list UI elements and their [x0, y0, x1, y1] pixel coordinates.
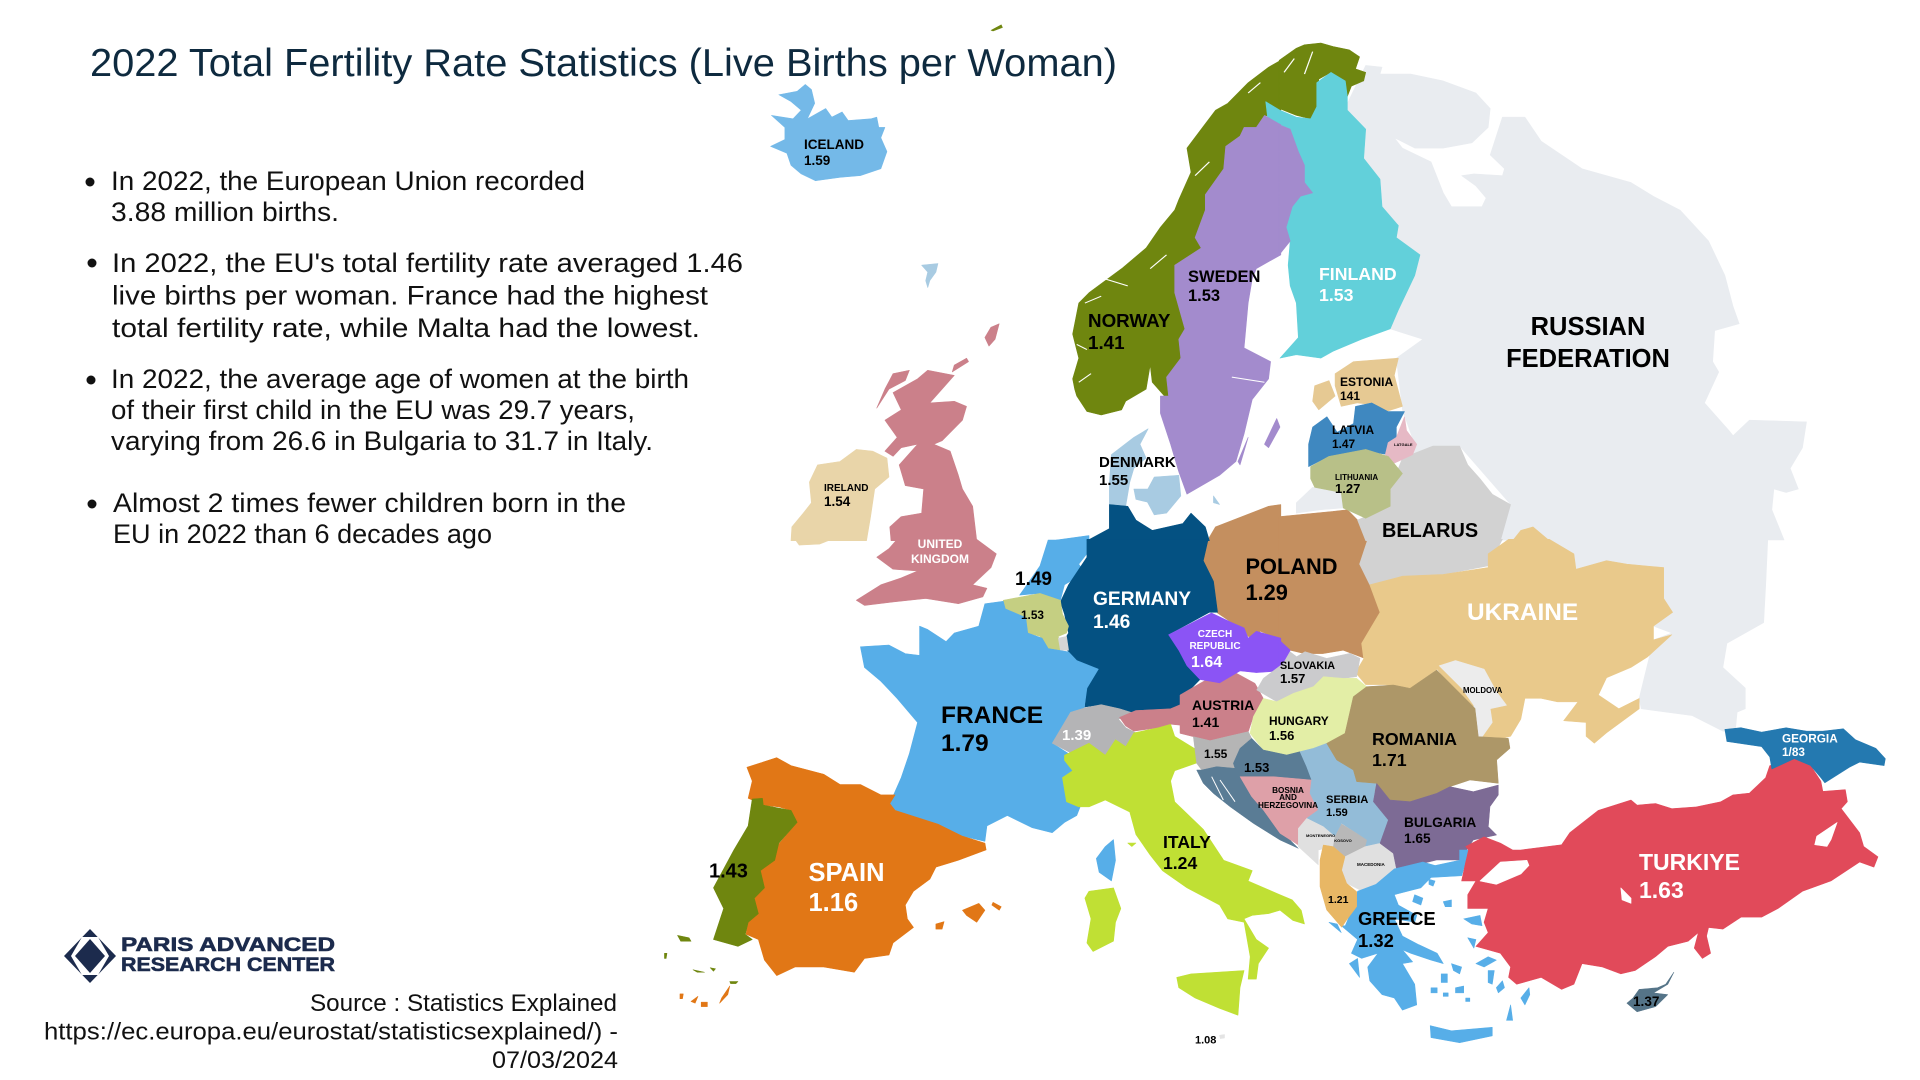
label: Georgia: 1/83	[1782, 745, 1805, 759]
source note: Source : Statistics Explained	[310, 990, 617, 1017]
label: Hungary: HUNGARY	[1269, 714, 1329, 728]
country: Norway	[1073, 43, 1366, 415]
country: Netherlands	[1020, 536, 1089, 600]
label: Serbia: SERBIA	[1326, 794, 1368, 806]
country: Slovakia	[1257, 652, 1360, 702]
label: United Kingdom: UNITED	[918, 537, 962, 551]
country: Serbia	[1300, 743, 1388, 847]
country: Albania	[1320, 845, 1357, 927]
label: Ukraine: UKRAINE	[1467, 599, 1578, 626]
country: Montenegro	[1298, 818, 1335, 865]
country: Bulgaria	[1373, 783, 1498, 870]
region: Latgale	[1385, 417, 1417, 463]
label: Poland: POLAND	[1246, 554, 1338, 579]
label: Italy: ITALY	[1163, 832, 1211, 852]
label: Serbia: 1.59	[1326, 807, 1348, 819]
label: Latgale: LATGALE	[1394, 442, 1413, 447]
label: Bulgaria: 1.65	[1404, 831, 1431, 846]
label: Austria: 1.41	[1192, 714, 1219, 730]
label: Turkiye: 1.63	[1639, 877, 1684, 903]
country: Bosnia and Herzegovina	[1240, 777, 1318, 845]
label: Finland: FINLAND	[1319, 264, 1397, 284]
country: Georgia	[1725, 728, 1885, 783]
label: Belgium value: 1.53	[1021, 608, 1044, 622]
bullet: births: 3.88 million births.	[111, 197, 339, 227]
label: Bosnia and Herzegovina: BOSNIA	[1272, 786, 1304, 795]
country: Italy	[1062, 724, 1304, 1015]
label: Switzerland value: 1.39	[1062, 727, 1091, 744]
label: Germany: GERMANY	[1093, 589, 1191, 610]
territory: Jan Mayen	[991, 25, 1002, 31]
bullet: six decades: EU in 2022 than 6 decades ago	[113, 519, 492, 549]
logo: Paris Advanced Research Center: RESEARCH CENTER	[121, 954, 335, 976]
label: Cyprus value: 1.37	[1633, 994, 1659, 1009]
country: Russian Federation	[1296, 65, 1807, 733]
label: Slovakia: SLOVAKIA	[1280, 660, 1335, 672]
label: Denmark: DENMARK	[1099, 454, 1176, 471]
label: Iceland: 1.59	[804, 153, 830, 168]
bullet: fertility rate: In 2022, the EU's total fertility rate averaged 1.46	[112, 248, 743, 278]
label: Austria: AUSTRIA	[1192, 697, 1254, 713]
label: Czech Republic value: 1.64	[1191, 654, 1222, 671]
logo: Paris Advanced Research Center	[64, 929, 335, 983]
label: Russian Federation: RUSSIAN	[1531, 313, 1645, 341]
label: Slovakia: 1.57	[1280, 671, 1305, 686]
country: Finland	[1266, 72, 1420, 358]
country: Turkiye	[1462, 759, 1878, 989]
bullet: six decades: Almost 2 times fewer children born in the	[113, 488, 626, 518]
label: Denmark: 1.55	[1099, 472, 1128, 489]
label: Germany: 1.46	[1093, 612, 1130, 633]
country: Germany	[1060, 505, 1218, 714]
label: Latvia: 1.47	[1332, 437, 1356, 451]
country: Hungary	[1250, 677, 1367, 755]
bullet: births	[86, 166, 585, 227]
country: North Macedonia	[1342, 843, 1396, 890]
country: Slovenia	[1193, 732, 1252, 770]
label: Kosovo: KOSOVO	[1334, 838, 1352, 843]
bullet: average age: varying from 26.6 in Bulgaria to 31.7 in Italy.	[111, 426, 653, 456]
bullet: six decades	[88, 488, 626, 549]
country: Switzerland	[1052, 705, 1136, 755]
label: Bosnia and Herzegovina: HERZEGOVINA	[1258, 801, 1318, 810]
label: Finland: 1.53	[1319, 285, 1354, 305]
label: Greece: 1.32	[1358, 930, 1394, 951]
country: Ukraine	[1356, 527, 1673, 743]
label: Malta value: 1.08	[1195, 1034, 1216, 1046]
label: Bulgaria: BULGARIA	[1404, 815, 1476, 830]
country: Romania	[1327, 670, 1510, 802]
country: Belgium	[1003, 593, 1069, 650]
label: Spain: 1.16	[808, 889, 858, 917]
label: Russian Federation: FEDERATION	[1506, 345, 1670, 373]
label: Romania: 1.71	[1372, 750, 1407, 770]
label: Poland: 1.29	[1246, 580, 1288, 605]
country: Estonia	[1313, 358, 1402, 412]
label: Spain: SPAIN	[808, 859, 885, 887]
bullet: average age: of their first child in the EU was 29.7 years,	[111, 395, 635, 425]
label: Czech Republic: CZECH	[1198, 629, 1232, 640]
bullet: fertility rate: live births per woman. France had the highest	[112, 280, 709, 310]
source note: 07/03/2024	[492, 1047, 618, 1074]
label: Albania value: 1.21	[1328, 894, 1349, 906]
country: Belarus	[1358, 446, 1511, 585]
country: France	[860, 601, 1116, 881]
country: Iceland	[771, 84, 887, 181]
label: Czech Republic: REPUBLIC	[1189, 641, 1241, 652]
country: Austria	[1120, 673, 1263, 741]
map of Europe	[664, 25, 1885, 1043]
country: Spain	[680, 758, 1001, 1007]
label: Estonia: ESTONIA	[1340, 375, 1393, 389]
label: Norway: NORWAY	[1088, 310, 1170, 331]
label: Sweden: SWEDEN	[1188, 268, 1260, 286]
label: Croatia value: 1.53	[1244, 760, 1269, 775]
label: Netherlands value: 1.49	[1015, 569, 1052, 590]
label: United Kingdom: KINGDOM	[911, 552, 969, 566]
bullet: births: In 2022, the European Union recorded	[111, 166, 585, 196]
country: Lithuania	[1311, 449, 1402, 518]
label: Iceland: ICELAND	[804, 137, 864, 152]
country: Greece	[1329, 850, 1530, 1043]
country: Denmark	[1109, 429, 1220, 515]
label: Estonia: 141	[1340, 389, 1360, 403]
label: Moldova: MOLDOVA	[1463, 686, 1503, 695]
map labels	[709, 137, 1838, 1046]
label: Ireland: 1.54	[824, 494, 851, 509]
logo: Paris Advanced Research Center: PARIS ADVANCED	[121, 934, 335, 956]
country: Czech Republic	[1169, 613, 1290, 683]
label: Italy: 1.24	[1163, 853, 1197, 873]
label: Portugal value: 1.43	[709, 860, 748, 882]
sea of Marmara and Turkish lakes	[1480, 822, 1837, 903]
bullet: average age: In 2022, the average age of women at the birth	[111, 364, 689, 394]
label: Greece: GREECE	[1358, 908, 1436, 929]
country: United Kingdom	[856, 324, 999, 605]
label: Bosnia and Herzegovina: AND	[1279, 793, 1297, 802]
label: France: 1.79	[941, 730, 989, 757]
label: Georgia: GEORGIA	[1782, 732, 1838, 746]
label: Sweden: 1.53	[1188, 287, 1220, 305]
label: Norway: 1.41	[1088, 332, 1125, 353]
bullet: average age	[86, 364, 689, 456]
country: Ireland	[791, 449, 889, 545]
bullet: fertility rate	[88, 248, 743, 343]
label: Slovenia value: 1.55	[1204, 747, 1228, 761]
country: Luxembourg	[1058, 636, 1069, 650]
country: Malta	[1220, 1035, 1224, 1039]
country: Moldova	[1439, 661, 1507, 740]
territory: Faroe Islands	[922, 263, 938, 288]
label: Montenegro: MONTENEGRO	[1306, 833, 1335, 838]
label: Ireland: IRELAND	[824, 483, 868, 494]
country: Cyprus	[1627, 972, 1674, 1012]
country: Croatia	[1197, 738, 1312, 848]
label: Macedonia: MACEDONIA	[1357, 862, 1385, 867]
label: Turkiye: TURKIYE	[1639, 849, 1740, 875]
label: Belarus: BELARUS	[1382, 520, 1478, 542]
label: Lithuania: 1.27	[1335, 481, 1360, 496]
country: Latvia	[1309, 403, 1404, 467]
label: Latvia: LATVIA	[1332, 423, 1374, 437]
title: 2022 Total Fertility Rate Statistics (Live Births per Woman)	[90, 42, 1117, 85]
country: Poland	[1203, 505, 1380, 659]
country: Sweden	[1160, 115, 1313, 494]
label: Hungary: 1.56	[1269, 728, 1294, 743]
source note	[44, 990, 618, 1074]
label: France: FRANCE	[941, 702, 1043, 729]
source note: https://ec.europa.eu/eurostat/statisticsexplained/) -	[44, 1018, 618, 1046]
country: Portugal	[664, 798, 797, 984]
country: Kosovo	[1333, 824, 1367, 857]
label: Lithuania: LITHUANIA	[1335, 473, 1378, 482]
bullet: fertility rate: total fertility rate, while Malta had the lowest.	[112, 313, 700, 343]
label: Romania: ROMANIA	[1372, 729, 1457, 749]
panel: key facts bullets	[86, 166, 743, 549]
